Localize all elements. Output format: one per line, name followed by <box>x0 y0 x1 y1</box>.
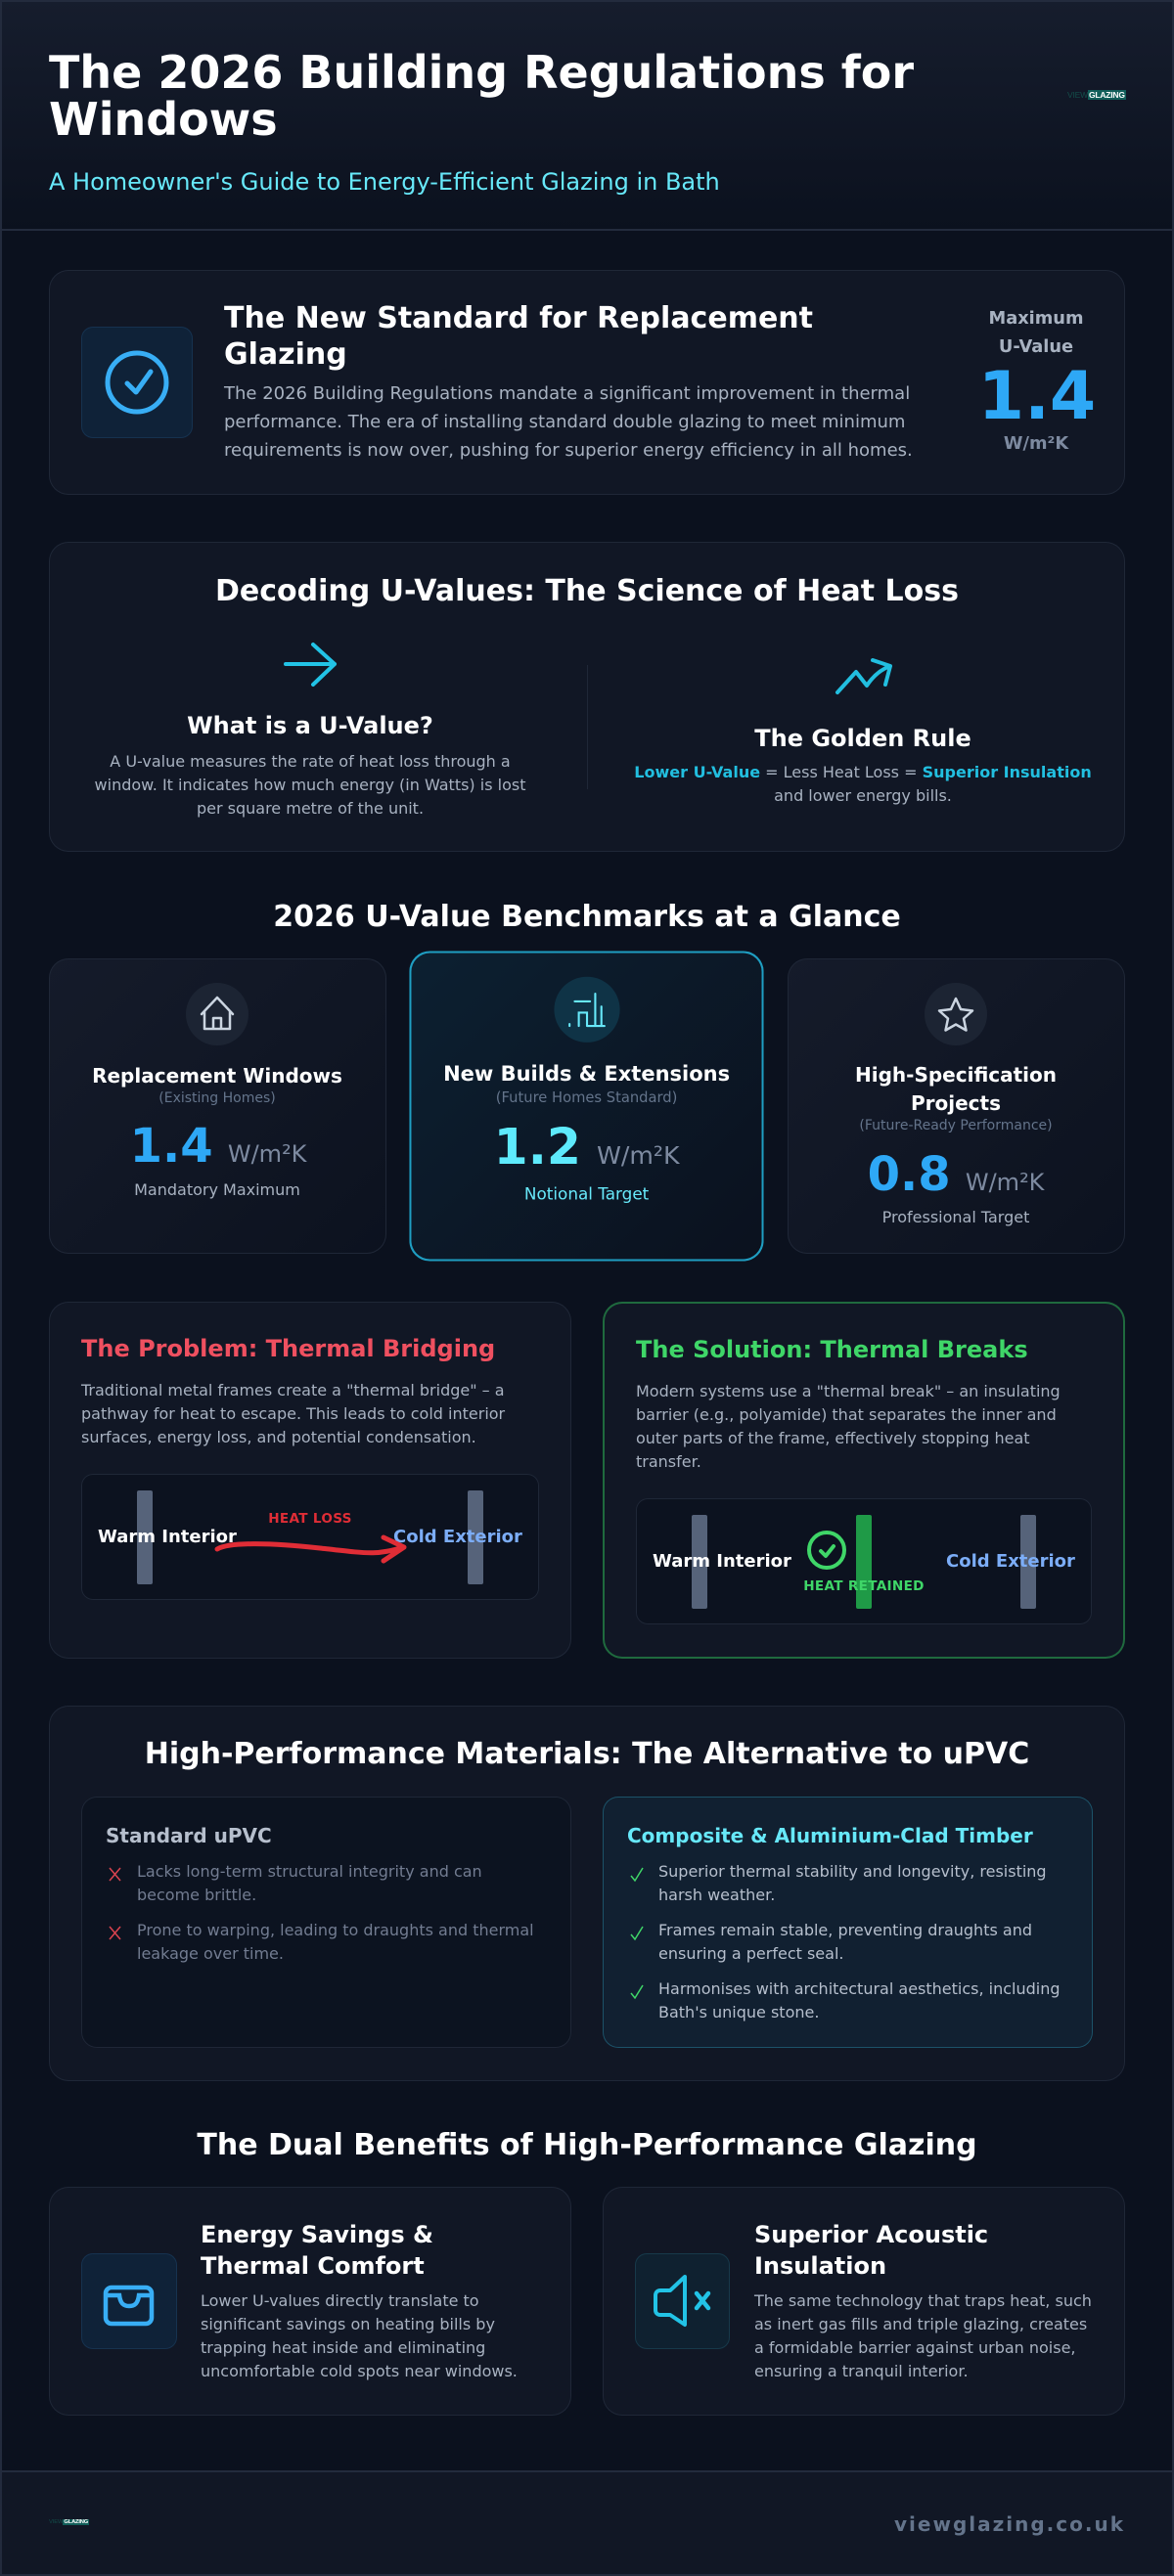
logo: view glazing: VIEWGLAZING <box>1067 90 1125 100</box>
diagram: thermal bridge <box>81 1474 539 1600</box>
cross marks <box>110 1868 121 1940</box>
list item <box>137 1862 482 1904</box>
description: The same technology that traps heat, such <box>754 2291 1092 2310</box>
card title: New Builds & Extensions <box>443 1061 730 1086</box>
label: heat loss: HEAT LOSS <box>268 1511 352 1527</box>
description: uncomfortable cold spots near windows. <box>201 2362 518 2380</box>
stat unit: W/m²K <box>1004 433 1068 454</box>
list item: Harmonises with architectural aesthetics, including <box>658 1979 1061 1998</box>
panel: high specification <box>788 958 1125 1254</box>
list item <box>658 1921 1032 1963</box>
diagram: thermal break <box>636 1498 1092 1624</box>
description: ensuring a tranquil interior. <box>754 2362 969 2380</box>
description: trapping heat inside and eliminating <box>201 2338 485 2357</box>
description: pathway for heat to escape. This leads to cold interior <box>81 1404 505 1423</box>
description: barrier (e.g., polyamide) that separates the inner and <box>636 1405 1057 1424</box>
description: outer parts of the frame, effectively stopping heat <box>636 1429 1030 1447</box>
icon: muted speaker <box>635 2253 730 2349</box>
icon: star <box>925 983 987 1045</box>
column text: what is a u-value: A U-value measures the rate of heat loss through a <box>110 752 511 771</box>
panel: the problem <box>49 1302 571 1659</box>
heading: Glazing <box>224 337 347 372</box>
icon: check <box>807 1531 846 1570</box>
list item: harsh weather. <box>658 1886 775 1904</box>
description <box>753 2291 1092 2380</box>
panel: acoustic insulation <box>603 2187 1125 2416</box>
description: significant savings on heating bills by <box>201 2315 495 2333</box>
heading: Decoding U-Values: The Science of Heat Loss <box>215 574 959 608</box>
list item: become brittle. <box>137 1886 256 1904</box>
description: Modern systems use a "thermal break" – an insulating <box>636 1382 1061 1400</box>
description <box>201 2291 518 2380</box>
frame bar: outer <box>1020 1515 1036 1609</box>
stat: maximum u-value: Maximum <box>989 308 1083 329</box>
header <box>0 0 1174 231</box>
frame bar: outer <box>468 1490 483 1584</box>
label: warm interior: Warm Interior <box>653 1551 791 1572</box>
list item: Superior thermal stability and longevity, resisting <box>658 1862 1047 1881</box>
value: 0.8 W/m²K <box>868 1146 1044 1201</box>
column heading: what is a u-value: What is a U-Value? <box>187 712 433 739</box>
thermal break bar <box>856 1515 872 1609</box>
panel: decoding u-values <box>49 542 1125 852</box>
list item: Prone to warping, leading to draughts and thermal <box>137 1921 534 1939</box>
panel: new standard <box>49 270 1125 495</box>
title: The 2026 Building Regulations for <box>49 46 914 99</box>
column text: golden rule: Lower U-Value = Less Heat Loss = Superior Insulation <box>634 763 1092 781</box>
list item <box>137 1921 534 1963</box>
card subtitle: (Existing Homes) <box>158 1090 276 1106</box>
list item: Lacks long-term structural integrity and can <box>137 1862 482 1881</box>
card label: Professional Target <box>882 1208 1029 1226</box>
heading: The New Standard for Replacement <box>224 301 813 335</box>
title <box>49 46 914 146</box>
card subtitle: (Future-Ready Performance) <box>859 1118 1053 1133</box>
icon: check circle <box>81 327 193 438</box>
card: composite <box>603 1797 1093 2048</box>
panel: materials <box>49 1706 1125 2081</box>
value: 1.2 W/m²K <box>494 1119 680 1176</box>
heading: Superior Acoustic <box>754 2221 988 2248</box>
value: 1.4 W/m²K <box>130 1119 306 1174</box>
card title: Replacement Windows <box>92 1064 342 1088</box>
label: cold exterior: Cold Exterior <box>393 1527 522 1547</box>
column text: golden rule: and lower energy bills. <box>774 786 952 805</box>
stat: maximum u-value <box>989 308 1083 357</box>
list item: Frames remain stable, preventing draughts and <box>658 1921 1032 1939</box>
heading: The Problem: Thermal Bridging <box>81 1335 495 1362</box>
description: a formidable barrier against urban noise, <box>754 2338 1076 2357</box>
column text: what is a u-value: per square metre of the unit. <box>197 799 424 818</box>
icon: arrow <box>284 642 337 687</box>
stat: maximum u-value: U-Value <box>999 336 1073 357</box>
stat value: 1.4 <box>978 358 1096 435</box>
divider <box>587 665 588 789</box>
column text: what is a u-value <box>95 752 526 818</box>
description: performance. The era of installing standard double glazing to meet minimum <box>224 412 905 432</box>
icon: house <box>186 983 248 1045</box>
card heading: Standard uPVC <box>106 1824 272 1847</box>
card: standard upvc <box>81 1797 571 2048</box>
list item <box>658 1862 1047 1904</box>
title: Windows <box>49 93 278 146</box>
description: Traditional metal frames create a "thermal bridge" – a <box>81 1381 505 1399</box>
logo: view glazing: VIEWGLAZING <box>49 2519 88 2525</box>
description: requirements is now over, pushing for superior energy efficiency in all homes. <box>224 440 913 461</box>
heading <box>754 2221 988 2280</box>
list item: leakage over time. <box>137 1944 284 1963</box>
label: cold exterior: Cold Exterior <box>946 1551 1075 1572</box>
check marks <box>630 1868 644 1999</box>
footer <box>0 2470 1174 2576</box>
panel: energy savings <box>49 2187 571 2416</box>
list item <box>658 1979 1061 2021</box>
frame bar: inner <box>137 1490 153 1584</box>
panel: the solution <box>603 1302 1125 1659</box>
description: as inert gas fills and triple glazing, creates <box>754 2315 1087 2333</box>
subtitle: A Homeowner's Guide to Energy-Efficient Glazing in Bath <box>49 168 720 196</box>
list item: Bath's unique stone. <box>658 2003 819 2021</box>
description: Lower U-values directly translate to <box>201 2291 479 2310</box>
card title: Projects <box>911 1091 1001 1115</box>
card heading: Composite & Aluminium-Clad Timber <box>627 1824 1033 1847</box>
description <box>223 383 913 461</box>
column text: what is a u-value: window. It indicates how much energy (in Watts) is lost <box>95 776 525 794</box>
heading: Energy Savings & <box>201 2221 433 2248</box>
heading <box>224 301 813 372</box>
card title <box>855 1062 1057 1115</box>
heading: benchmarks: 2026 U-Value Benchmarks at a Glance <box>273 900 901 934</box>
label: warm interior: Warm Interior <box>98 1527 237 1547</box>
description <box>636 1382 1061 1471</box>
description: surfaces, energy loss, and potential condensation. <box>81 1428 476 1446</box>
column heading: golden rule: The Golden Rule <box>754 725 971 752</box>
card label: Notional Target <box>524 1184 650 1204</box>
list item: ensuring a perfect seal. <box>658 1944 843 1963</box>
panel: replacement windows <box>49 958 386 1254</box>
icon: bars <box>555 977 620 1043</box>
column text: golden rule <box>634 763 1092 805</box>
card title: High-Specification <box>855 1062 1057 1086</box>
heading: dual benefits: The Dual Benefits of High-Performance Glazing <box>197 2128 977 2162</box>
description <box>80 1381 505 1446</box>
arrow: heat loss <box>215 1535 407 1563</box>
heading: High-Performance Materials: The Alternative to uPVC <box>145 1737 1029 1771</box>
description: transfer. <box>636 1452 701 1471</box>
description: The 2026 Building Regulations mandate a significant improvement in thermal <box>224 383 910 404</box>
icon: wallet <box>81 2253 177 2349</box>
icon: trend up <box>835 658 892 694</box>
card label: Mandatory Maximum <box>134 1180 300 1199</box>
card subtitle: (Future Homes Standard) <box>496 1089 678 1106</box>
label: heat retained: HEAT RETAINED <box>803 1578 925 1594</box>
heading <box>201 2221 433 2280</box>
website url: viewglazing.co.uk <box>894 2512 1125 2536</box>
heading: Thermal Comfort <box>201 2252 425 2280</box>
heading: The Solution: Thermal Breaks <box>636 1336 1028 1363</box>
frame bar: inner <box>692 1515 707 1609</box>
panel: new builds <box>410 951 764 1262</box>
heading: Insulation <box>754 2252 886 2280</box>
